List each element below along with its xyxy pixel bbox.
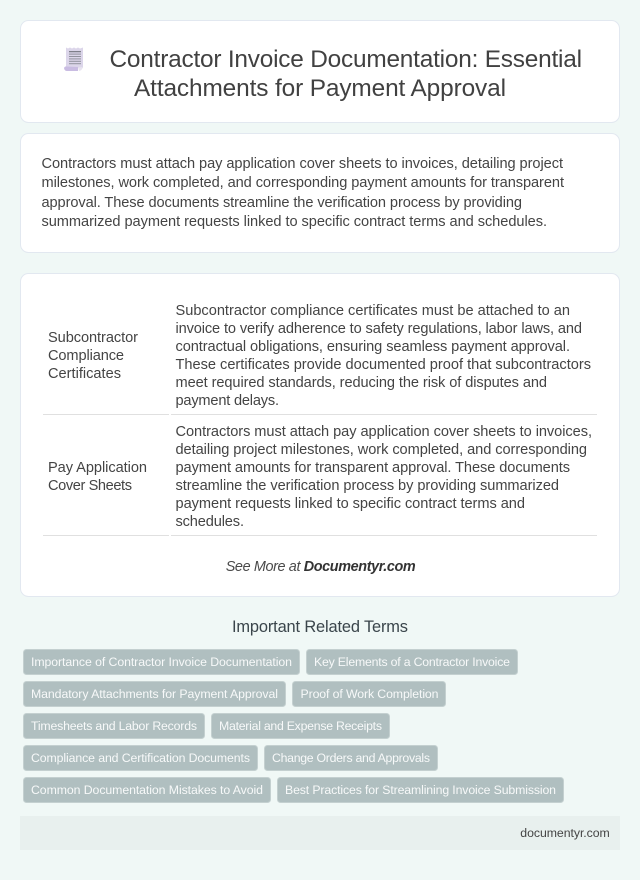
row description: payment requests linked to specific contract terms and (176, 496, 525, 512)
tag (212, 714, 390, 738)
tag: Proof of Work Completion (300, 687, 439, 701)
footer (20, 816, 620, 850)
intro text (42, 156, 564, 230)
row description: These certificates provide documented proof that subcontractors (176, 357, 591, 373)
icon: invoice receipt (64, 48, 83, 71)
tag: Common Documentation Mistakes to Avoid (31, 783, 263, 797)
title: Attachments for Payment Approval (134, 75, 506, 102)
panel: introduction (20, 134, 620, 252)
panel: title header (20, 20, 620, 122)
tag (24, 714, 204, 738)
intro text: milestones, work completed, and corresponding payment amounts for transparent (42, 175, 564, 191)
row description: Contractors must attach pay application cover sheets to invoices, (176, 424, 592, 440)
row description: invoice to verify adherence to safety regulations, labor laws, and (176, 321, 582, 337)
row label: Cover Sheets (48, 478, 132, 494)
row label: Certificates (48, 366, 121, 382)
row description: streamline the verification process by providing summarized (176, 478, 559, 494)
row description (176, 303, 591, 409)
row label: Subcontractor (48, 330, 138, 346)
tag: Timesheets and Labor Records (31, 719, 197, 733)
row description: Subcontractor compliance certificates must be attached to an (176, 303, 570, 319)
tag: Material and Expense Receipts (219, 719, 382, 733)
tag (24, 778, 270, 802)
row label: Pay Application (48, 460, 147, 476)
title (110, 46, 582, 102)
row label (48, 460, 147, 494)
tag: Mandatory Attachments for Payment Approval (31, 687, 278, 701)
row description: schedules. (176, 514, 244, 530)
tag (24, 650, 300, 674)
tag (24, 746, 258, 770)
row description: meet required standards, reducing the risk of disputes and (176, 375, 547, 391)
footer domain: documentyr.com (520, 826, 610, 840)
tag (278, 778, 564, 802)
tag: Key Elements of a Contractor Invoice (314, 655, 510, 669)
title: Contractor Invoice Documentation: Essential (110, 46, 582, 73)
panel: attachments table (20, 274, 620, 596)
row label (48, 330, 138, 382)
table row: pay application cover sheets (43, 424, 597, 536)
row description (176, 424, 592, 530)
heading: important related terms: Important Related Terms (232, 618, 408, 636)
row description: detailing project milestones, work completed, and corresponding (176, 442, 587, 458)
table row: subcontractor compliance certificates (43, 303, 597, 415)
see more link: See More at Documentyr.com (226, 559, 416, 575)
tag (306, 650, 518, 674)
row description: payment amounts for transparent approval. These documents (176, 460, 570, 476)
row description: payment delays. (176, 393, 279, 409)
intro text: summarized payment requests linked to specific contract terms and schedules. (42, 214, 547, 230)
tag: Change Orders and Approvals (272, 751, 430, 765)
tag (292, 682, 446, 706)
intro text: Contractors must attach pay application cover sheets to invoices, detailing project (42, 156, 563, 172)
intro text: approval. These documents streamline the verification process by providing (42, 195, 522, 211)
tag (24, 682, 286, 706)
tag: Importance of Contractor Invoice Documentation (31, 655, 292, 669)
row description: contractual obligations, ensuring seamless payment approval. (176, 339, 570, 355)
row label: Compliance (48, 348, 124, 364)
tag: Best Practices for Streamlining Invoice Submission (285, 783, 556, 797)
tag (264, 746, 438, 770)
related terms tags (24, 650, 564, 802)
tag: Compliance and Certification Documents (31, 751, 250, 765)
